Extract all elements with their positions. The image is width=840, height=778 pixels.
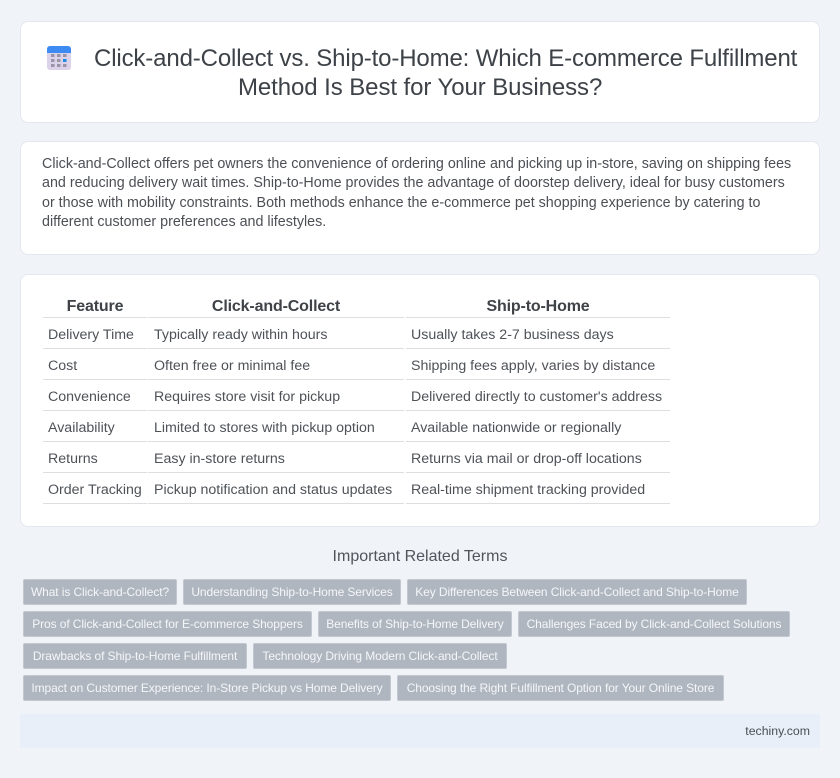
row: availability: Available nationwide or regionally [411,420,621,436]
intro paragraph: different customer preferences and lifestyles. [42,214,326,230]
related term tags: What is Click-and-Collect? [31,585,169,599]
related term tags: Benefits of Ship-to-Home Delivery [326,617,504,631]
intro paragraph [42,156,791,230]
row: order tracking: Pickup notification and status updates [154,482,392,498]
row: convenience: Convenience [48,389,131,405]
related term tags [23,579,790,701]
related term tags: Technology Driving Modern Click-and-Collect [262,649,498,663]
row: returns [48,451,642,467]
row: delivery time: Typically ready within hours [154,327,327,343]
related term tags: Understanding Ship-to-Home Services [191,585,393,599]
row: returns: Returns [48,451,98,467]
row: returns: Returns via mail or drop-off locations [411,451,642,467]
row: convenience [48,389,662,405]
heading: important related terms: Important Related Terms [333,548,507,565]
table headers: Click-and-Collect [212,298,340,315]
intro paragraph: Click-and-Collect offers pet owners the convenience of ordering online and picking up in-store, saving on shipping fees [42,156,791,172]
row: delivery time [48,327,614,343]
panel: title header [20,21,820,123]
title: Method Is Best for Your Business? [238,74,602,101]
row: convenience: Delivered directly to customer's address [411,389,662,405]
related term tags: Choosing the Right Fulfillment Option for Your Online Store [407,681,714,695]
footer source: techiny.com [745,724,810,738]
table headers: Feature [67,298,123,315]
panel: intro text [20,141,820,255]
related term tags: Pros of Click-and-Collect for E-commerce Shoppers [32,617,303,631]
intro paragraph: and reducing delivery wait times. Ship-to-Home provides the advantage of doorstep delivery, ideal for busy customers [42,175,785,191]
row: cost: Shipping fees apply, varies by distance [411,358,655,374]
icon: calendar [47,46,71,70]
row: order tracking: Order Tracking [48,482,142,498]
row: order tracking: Real-time shipment tracking provided [411,482,645,498]
table headers [67,298,590,315]
row: convenience: Requires store visit for pickup [154,389,340,405]
row: availability [48,420,622,436]
related term tags: Challenges Faced by Click-and-Collect Solutions [527,617,781,631]
related term tags: Drawbacks of Ship-to-Home Fulfillment [33,649,237,663]
row: cost: Cost [48,358,77,374]
related term tags: Impact on Customer Experience: In-Store Pickup vs Home Delivery [31,681,383,695]
row: delivery time: Delivery Time [48,327,134,343]
row: returns: Easy in-store returns [154,451,285,467]
footer bar [20,714,820,748]
title: Click-and-Collect vs. Ship-to-Home: Which E-commerce Fulfillment [94,45,797,72]
row: availability: Availability [48,420,115,436]
row: order tracking [48,482,645,498]
related term tags: Key Differences Between Click-and-Collect and Ship-to-Home [415,585,739,599]
title [94,45,798,101]
row: delivery time: Usually takes 2-7 business days [411,327,614,343]
intro paragraph: or those with mobility constraints. Both methods enhance the e-commerce pet shopping experience by catering to [42,195,760,211]
row: availability: Limited to stores with pickup option [154,420,375,436]
panel: comparison table [20,274,820,527]
table headers: Ship-to-Home [486,298,590,315]
row: cost [48,358,655,374]
row: cost: Often free or minimal fee [154,358,310,374]
